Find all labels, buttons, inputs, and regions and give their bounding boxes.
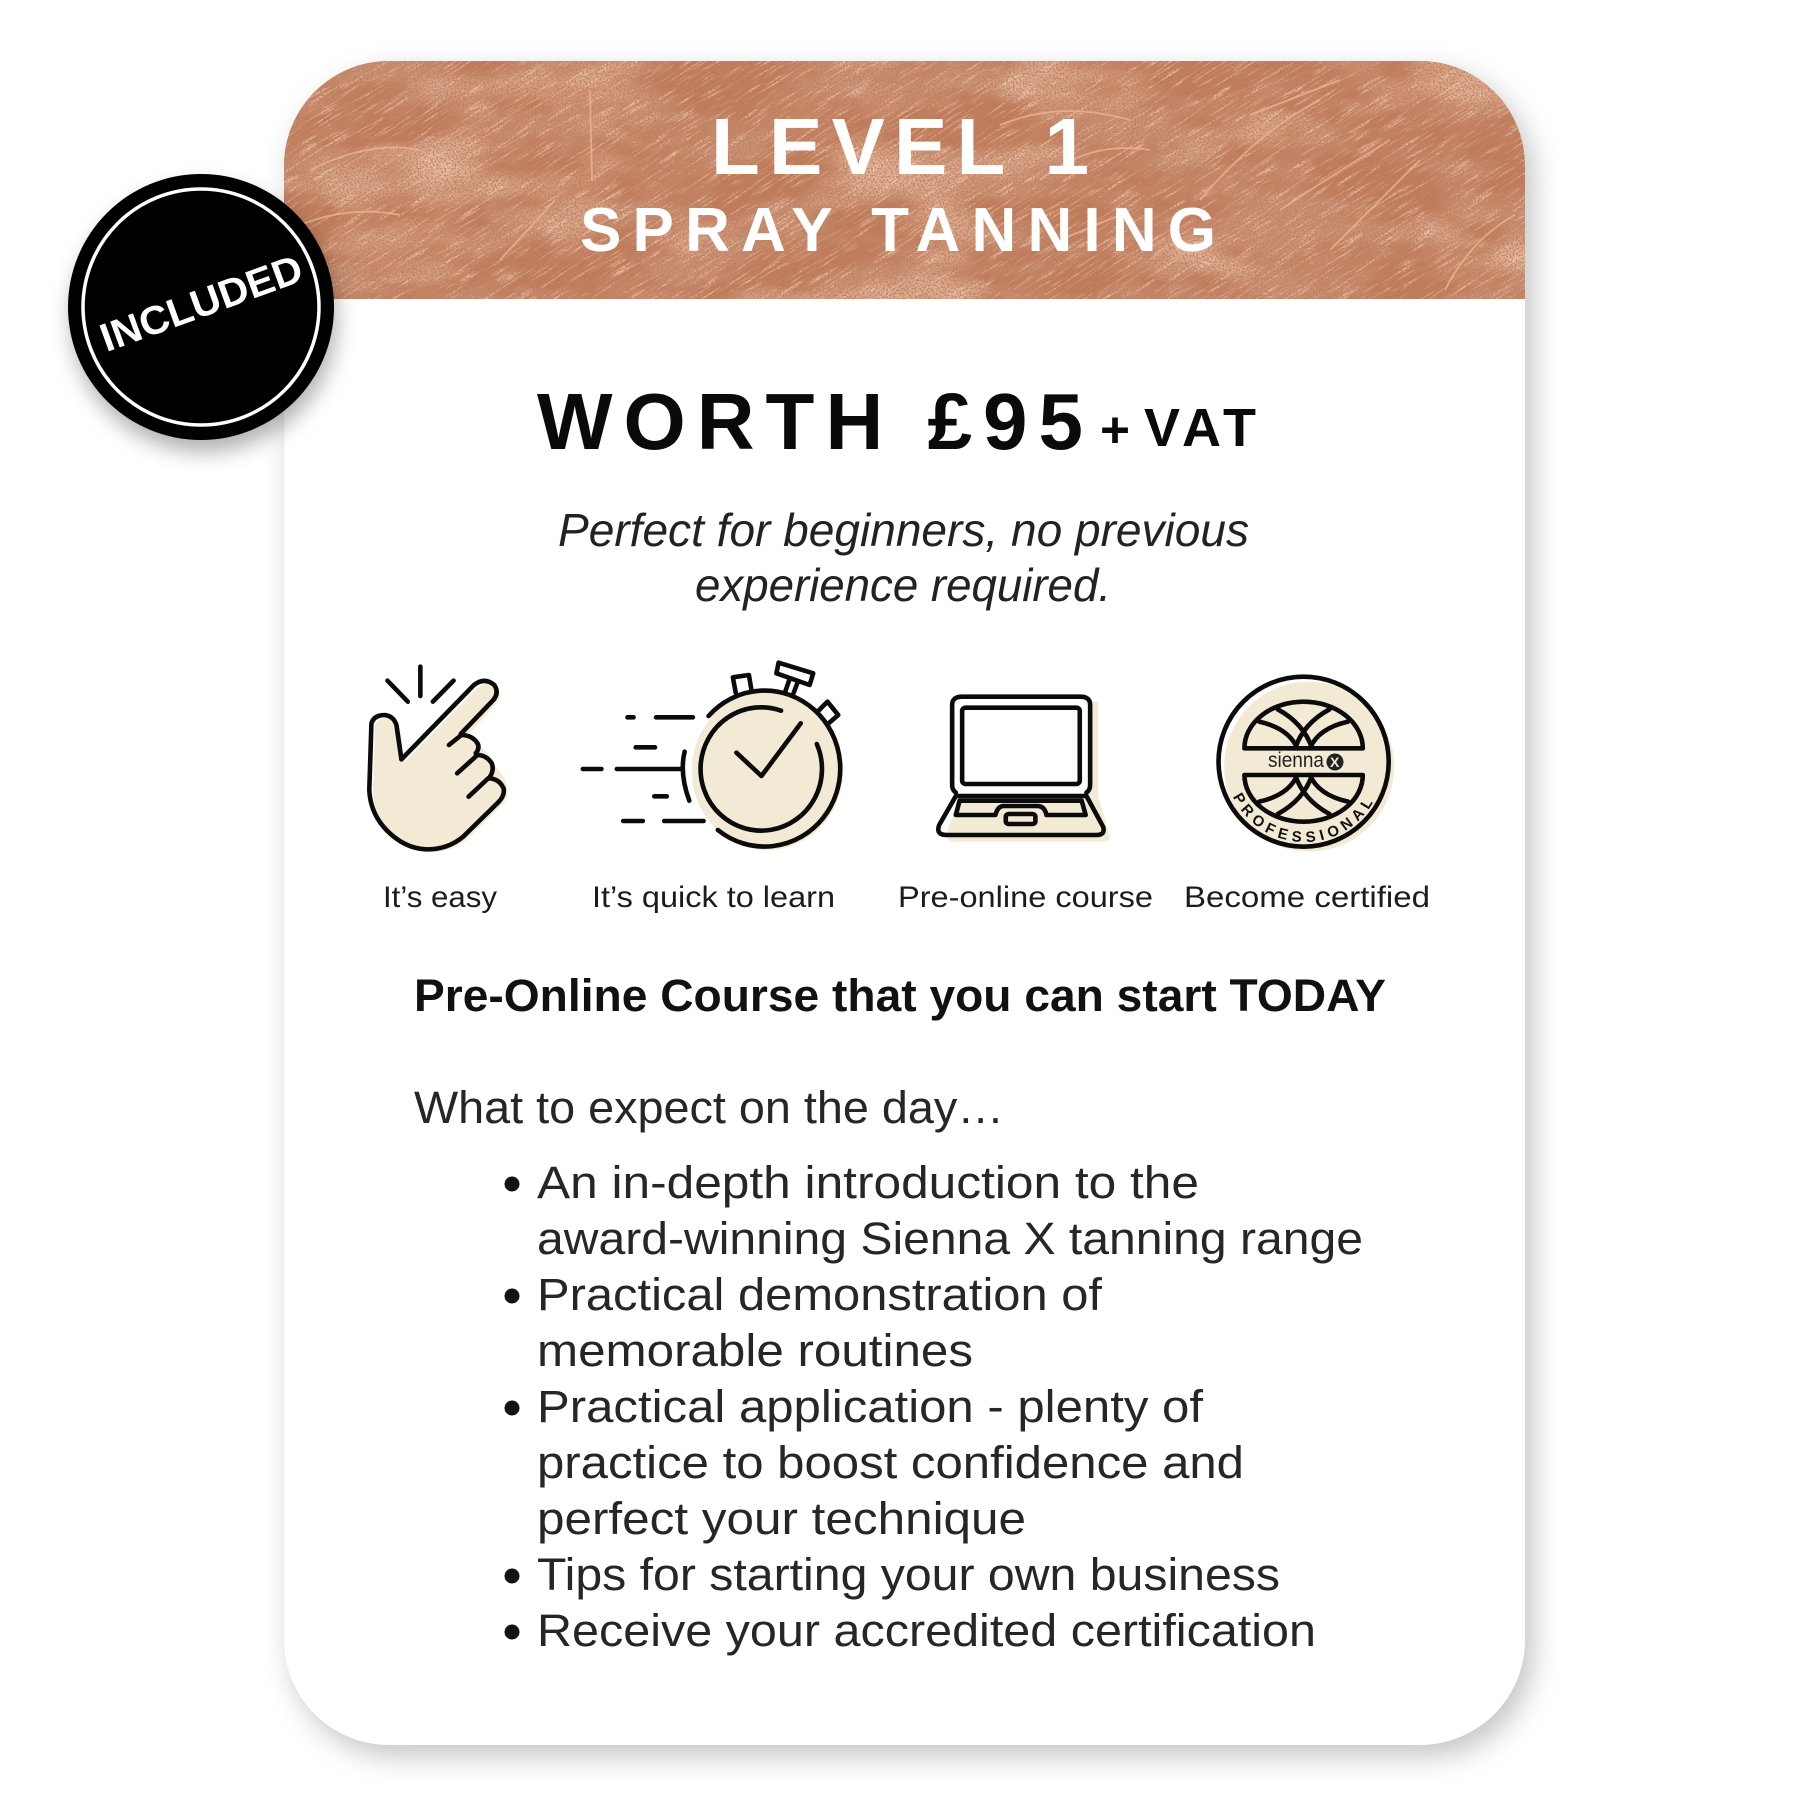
badge: included: INCLUDED [94,247,309,361]
heading: Level 1: LEVEL 1 [711,102,1089,191]
price: worth £95 + VAT: WORTH £95 [537,377,1083,466]
icon: Sienna X professional badge [1216,674,1394,852]
panel: card [278,58,1548,1770]
icon label: Become certified: Become certified [1184,881,1430,914]
subtitle [558,504,1249,611]
bullet list: award-winning Sienna X tanning range [537,1213,1363,1264]
heading: Spray Tanning: SPRAY TANNING [580,196,1216,265]
header band: copper foil [284,61,1525,299]
icon: laptop [938,697,1110,842]
bullet list: perfect your technique [537,1493,1026,1544]
icon: Sienna X professional badge: PROFESSIONAL [1233,792,1373,842]
bullet list [504,1157,1363,1656]
icon label: Pre-online course: Pre-online course [898,881,1153,914]
bullet list: Practical demonstration of [537,1269,1103,1320]
subtitle: Perfect for beginners, no previous [558,504,1249,556]
price: worth £95 + VAT: + [1100,402,1130,458]
subtitle: experience required. [695,559,1111,611]
bold heading: pre-online course: Pre-Online Course that you can start TODAY [414,970,1386,1021]
badge: included [68,174,334,440]
bullet list: practice to boost confidence and [537,1437,1244,1488]
bullet list: Practical application - plenty of [537,1381,1204,1432]
icon: Sienna X professional badge: X [1330,754,1340,770]
icon label: It's quick to learn: It’s quick to learn [592,881,835,914]
icon: stopwatch with check mark [583,663,843,850]
price: worth £95 + VAT: VAT [1144,398,1256,458]
bullet list: Receive your accredited certification [537,1605,1316,1656]
bullet list: memorable routines [537,1325,973,1376]
intro: what to expect: What to expect on the day… [414,1082,1004,1133]
icon: Sienna X professional badge: sienna [1268,749,1324,772]
icon: hand snapping fingers [369,667,507,852]
bullet list: An in-depth introduction to the [537,1157,1199,1208]
icon label: It's easy: It’s easy [383,881,497,914]
bullet list: Tips for starting your own business [537,1549,1280,1600]
